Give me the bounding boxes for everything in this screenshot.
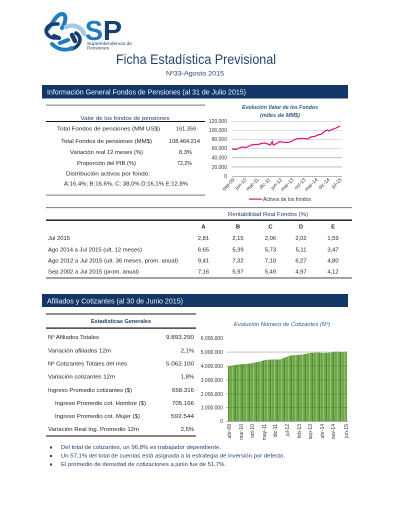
x axis labels: jun-12 xyxy=(269,177,284,192)
row: ingreso promedio: Ingreso Promedio cotizantes ($) xyxy=(48,388,132,394)
y axis labels: 80.000 xyxy=(212,137,227,143)
row: desde 2002 xyxy=(48,270,339,276)
row: variación cotizantes xyxy=(48,374,194,380)
x axis labels: mar-10 xyxy=(239,424,245,440)
row: últ. 12 meses: 3,47 xyxy=(327,248,339,254)
logo caption: Pensiones xyxy=(87,46,109,50)
x axis labels: mar-11 xyxy=(245,177,261,192)
row: ingreso mujer xyxy=(55,414,195,420)
row: ingreso mujer: Ingreso Promedio cot. Mujer ($) xyxy=(55,414,140,420)
y axis labels xyxy=(209,119,227,180)
legend: Activos de los fondos xyxy=(263,197,312,203)
row: variación afiliados xyxy=(48,348,194,354)
y axis labels xyxy=(201,336,223,425)
gridline 5.000.000 xyxy=(226,351,348,354)
x axis labels: mar-14 xyxy=(304,177,320,193)
row: proporción PIB xyxy=(77,161,192,167)
bars xyxy=(228,350,347,421)
gridlines xyxy=(232,121,342,177)
row: últ. 12 meses: 5,39 xyxy=(232,248,244,254)
row: desde 2002: 5,49 xyxy=(265,270,276,276)
y axis labels: 1.000.000 xyxy=(201,406,223,412)
row: variación cotizantes: 1,8% xyxy=(181,374,194,380)
row: variación real ingreso: 2,5% xyxy=(181,427,194,433)
x axis labels: jun-10 xyxy=(234,177,249,192)
y axis labels: 5.000.000 xyxy=(201,350,223,356)
column headers xyxy=(201,224,335,230)
row: variación real ingreso: Variación Real Ing. Promedio 12m xyxy=(48,427,139,433)
panel: valor de los fondos de pensiones xyxy=(46,105,205,196)
row: ingreso mujer: 592.544 xyxy=(171,414,195,420)
y axis labels: 3.000.000 xyxy=(201,378,223,384)
y axis labels: 0 xyxy=(220,419,223,425)
row: variación cotizantes: Variación cotizantes 12m xyxy=(48,374,115,380)
column headers: A xyxy=(201,224,206,230)
logo: P xyxy=(103,15,122,46)
logo wordmark: S xyxy=(85,15,103,46)
column headers: C xyxy=(268,224,273,230)
x axis labels: jul-15 xyxy=(330,177,344,191)
row: total fondos US$: 161.359 xyxy=(176,126,196,132)
x axis labels: sep-09 xyxy=(221,177,237,192)
row: afiliados totales: Nº Afiliados Totales xyxy=(48,334,99,341)
row: últ. 36 meses: 4,80 xyxy=(327,258,339,264)
row: desde 2002: 7,16 xyxy=(198,270,209,276)
y axis labels: 40.000 xyxy=(212,156,227,162)
column headers: E xyxy=(331,224,335,230)
logo caption: Superintendencia de xyxy=(87,41,133,46)
chart: evolución valor de los fondos xyxy=(209,105,344,203)
icon: star of hands xyxy=(46,14,84,50)
bullet notes xyxy=(50,445,285,468)
panel: información general heading xyxy=(42,85,348,98)
row: ingreso hombre: 705.166 xyxy=(172,401,194,407)
row: distribución valores: A:16,4%; B:16,6%, C: 38,0% D:16,1% E:12,8% xyxy=(64,182,188,188)
chart: evolución número de cotizantes xyxy=(201,321,350,440)
table: rentabilidad real fondos xyxy=(46,207,352,278)
x axis labels: nov-14 xyxy=(331,424,337,439)
y axis labels: 0 xyxy=(224,174,227,180)
chart title: (miles de MM$) xyxy=(260,113,300,119)
row: total fondos $: 108.464.214 xyxy=(169,139,201,145)
x axis labels: sep-13 xyxy=(308,424,314,439)
row: últ. 36 meses: 6,27 xyxy=(295,258,307,264)
table heading: Valor de los fondos de pensiones xyxy=(80,116,170,122)
row: desde 2002: Sep 2002 a Jul 2015 (prom. anual) xyxy=(48,270,139,276)
row: Jul 2015: 1,59 xyxy=(327,236,339,242)
row: últ. 36 meses: Ago 2012 a Jul 2015 (ult. 36 meses, prom. anual) xyxy=(48,258,178,264)
x axis labels xyxy=(221,177,344,193)
x axis labels: may-11 xyxy=(262,424,268,440)
x axis labels xyxy=(227,424,350,440)
row: total fondos $ xyxy=(61,139,201,145)
row: Jul 2015: 2,15 xyxy=(232,236,244,242)
x axis labels: oct-13 xyxy=(293,177,308,191)
row: últ. 36 meses: 7,10 xyxy=(265,258,276,264)
row: proporción PIB: 72,2% xyxy=(177,161,192,167)
y axis labels: 2.000.000 xyxy=(201,392,223,398)
table heading: Estadísticas Generales xyxy=(91,319,151,325)
row: últ. 12 meses: 5,11 xyxy=(296,248,306,254)
x axis labels: jul-12 xyxy=(285,424,291,437)
y axis labels: 4.000.000 xyxy=(201,364,223,370)
row: variación afiliados: 2,1% xyxy=(181,348,194,354)
x axis labels: mar-13 xyxy=(280,177,296,193)
note 2: Un 57,1% del total de cuentas está asignada a la estrategia de inversión por defecto. xyxy=(61,454,285,460)
row: últ. 12 meses: 6,65 xyxy=(198,248,209,254)
column headers: B xyxy=(236,224,240,230)
row: variación real: Variación real 12 meses (%) xyxy=(70,150,143,156)
row: últ. 36 meses xyxy=(48,258,339,264)
x axis labels: abr-14 xyxy=(320,424,326,438)
x axis labels: feb-13 xyxy=(297,424,303,438)
row: últ. 12 meses xyxy=(48,248,339,254)
row: Jul 2015: 2,81 xyxy=(198,236,209,242)
row: ingreso hombre: Ingreso Promedio cot. Hombre ($) xyxy=(55,401,146,407)
row: proporción PIB: Proporción del PIB (%) xyxy=(77,161,136,167)
row: total fondos US$: Total Fondos de pensiones (MM US$) xyxy=(57,126,160,132)
row: ingreso promedio: 658.316 xyxy=(172,388,194,394)
row: ingreso hombre xyxy=(55,401,194,407)
row: Jul 2015: 2,06 xyxy=(265,236,276,242)
row: desde 2002: 5,97 xyxy=(232,270,244,276)
x axis labels: dic-11 xyxy=(258,177,272,191)
logo caption xyxy=(87,41,133,50)
row: variación afiliados: Variación afiliados 12m xyxy=(48,348,111,354)
y axis labels: 100.000 xyxy=(209,128,227,134)
row: cotizantes totales: Nº Cotizantes Totales del mes xyxy=(48,360,127,368)
row: distribución: Distribución activos por fondo: xyxy=(66,172,150,178)
row: últ. 12 meses: Ago 2014 a Jul 2015 (ult. 12 meses) xyxy=(48,248,142,254)
x axis labels: jun-15 xyxy=(344,424,350,439)
x axis labels: dic-11 xyxy=(273,424,279,437)
note 3: El promedio de densidad de cotizaciones a junio fue de 51,7%. xyxy=(61,462,226,468)
column headers: D xyxy=(299,224,303,230)
note 1: Del total de cotizantes, un 96,8% es trabajador dependiente. xyxy=(61,445,221,451)
row: desde 2002: 4,12 xyxy=(327,270,339,276)
subtitle: Nº33-Agosto 2015 xyxy=(166,70,224,78)
chart title: Evolución Número de Cotizantes (Nº) xyxy=(234,321,330,328)
panel: información general heading: Información General Fondos de Pensiones (al 31 de Julio 2015) xyxy=(47,88,246,96)
chart title xyxy=(242,105,318,119)
row: últ. 36 meses: 9,41 xyxy=(198,258,209,264)
row: últ. 36 meses: 7,32 xyxy=(232,258,244,264)
row: afiliados totales: 9.893.290 xyxy=(166,335,194,341)
row: Jul 2015: 2,02 xyxy=(295,236,307,242)
row: cotizantes totales xyxy=(48,360,194,368)
y axis labels: 20.000 xyxy=(212,165,227,171)
row: variación real: 8,3% xyxy=(179,150,192,156)
row: total fondos $: Total Fondos de pensiones (MM$) xyxy=(61,139,152,145)
title: Ficha Estadística Previsional xyxy=(116,51,276,67)
row: últ. 12 meses: 5,73 xyxy=(265,248,276,254)
table: estadísticas generales xyxy=(46,314,196,436)
row: variación real ingreso xyxy=(48,427,194,433)
x axis labels: abr-09 xyxy=(227,424,233,438)
panel: afiliados y cotizantes heading: Afiliados y Cotizantes (al 30 de Junio 2015) xyxy=(47,296,183,306)
y axis labels: 6.000.000 xyxy=(201,336,223,342)
y axis labels: 120.000 xyxy=(209,119,227,125)
chart title: Evolución Valor de los Fondos xyxy=(242,105,318,111)
table heading: Rentabilidad Real Fondos (%) xyxy=(228,212,308,218)
logo xyxy=(46,14,133,50)
x axis labels: dic-14 xyxy=(318,177,332,191)
data line xyxy=(232,126,340,150)
row: variación real xyxy=(70,150,192,156)
gridlines over bars xyxy=(226,366,348,408)
row: afiliados totales xyxy=(48,334,194,341)
row: ingreso promedio xyxy=(48,388,194,394)
row: Jul 2015 xyxy=(48,236,339,242)
y axis labels: 60.000 xyxy=(212,146,227,152)
x axis labels: oct-10 xyxy=(250,424,256,438)
row: desde 2002: 4,97 xyxy=(295,270,307,276)
panel: afiliados y cotizantes heading xyxy=(42,294,348,307)
row: cotizantes totales: 5.062.100 xyxy=(166,362,194,368)
row: Jul 2015: Jul 2015 xyxy=(48,236,70,242)
